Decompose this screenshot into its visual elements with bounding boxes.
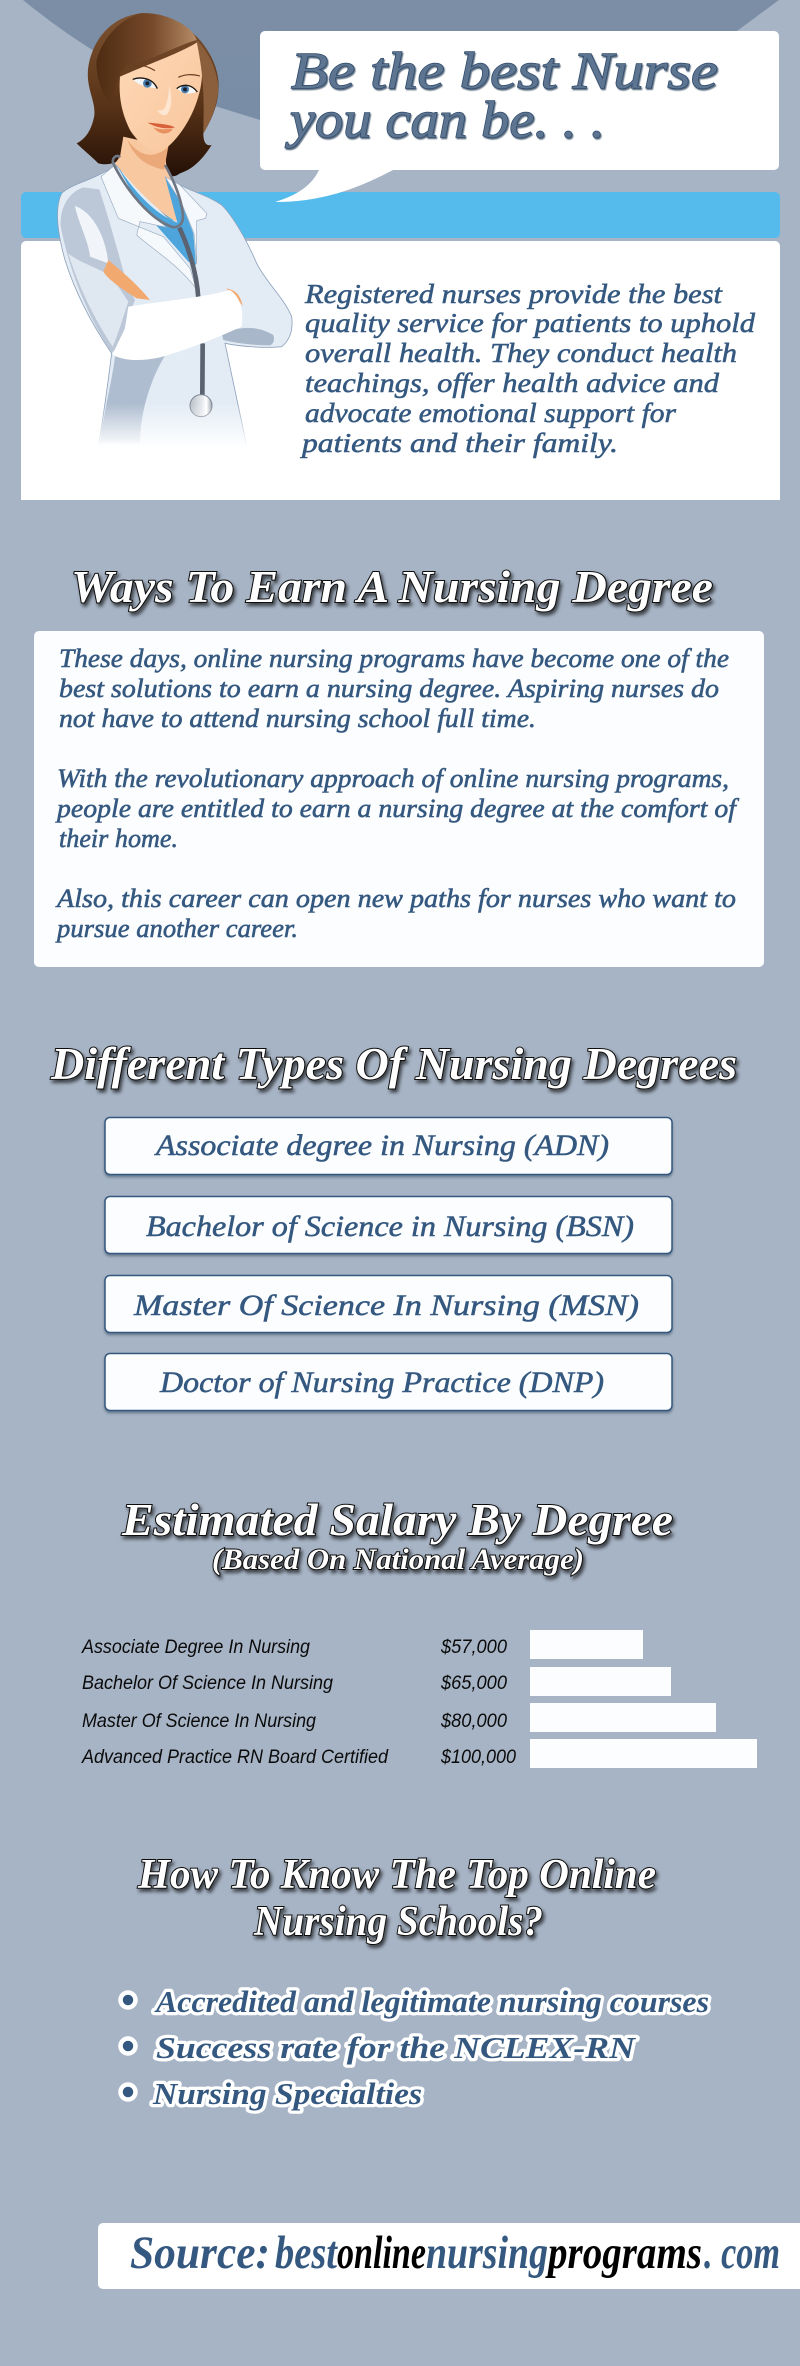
face: [120, 42, 202, 152]
left sleeve highlight: [75, 206, 108, 263]
row: bachelor: [82, 1667, 671, 1696]
right hair strand: [197, 40, 218, 133]
source box: [98, 2223, 800, 2289]
speech bubble: [260, 31, 779, 202]
heading: top online schools: How To Know The Top Online: [137, 1852, 656, 1898]
intro text: advocate emotional support for: [305, 398, 677, 428]
list: school criteria: [120, 1984, 709, 2111]
right forearm shadow: [222, 328, 274, 345]
intro text: patients and their family.: [300, 428, 618, 458]
panel: ways to earn: [34, 631, 764, 967]
row: master: $80,000: [440, 1710, 507, 1732]
heading: degree types: Different Types Of Nursing Degrees: [50, 1038, 737, 1089]
heading: top online schools: Nursing Schools?: [253, 1899, 543, 1945]
white intro panel: [21, 241, 780, 500]
intro text: quality service for patients to uphold: [305, 308, 756, 338]
title: [285, 43, 718, 149]
row: associate: Associate Degree In Nursing: [81, 1636, 310, 1658]
front hair: [96, 13, 197, 108]
ways to earn text: people are entitled to earn a nursing degree at the comfort of: [55, 794, 740, 823]
heading: salary: Estimated Salary By Degree: [121, 1494, 673, 1545]
title: Be the best Nurse: [291, 43, 718, 100]
degree box: MSN: [105, 1276, 672, 1332]
bullet item 3: Nursing Specialties: [152, 2076, 422, 2111]
left sleeve lower light: [68, 253, 128, 347]
degree box: BSN: Bachelor of Science in Nursing (BSN): [146, 1210, 634, 1243]
left sleeve shadow: [61, 187, 135, 353]
title: you can be. . .: [285, 92, 605, 149]
ways to earn text: Also, this career can open new paths for nurses who want to: [55, 884, 736, 913]
dark header shape: [23, 0, 779, 120]
row: bachelor: Bachelor Of Science In Nursing: [82, 1672, 333, 1694]
neck shadow: [127, 140, 168, 170]
subheading: national average: (Based On National Average): [212, 1543, 584, 1576]
nose: [157, 85, 171, 115]
intro text: Registered nurses provide the best: [304, 279, 724, 309]
row: advanced: Advanced Practice RN Board Certified: [81, 1746, 389, 1768]
ways to earn text: their home.: [59, 824, 178, 853]
heading: ways to earn: Ways To Earn A Nursing Degree: [71, 561, 713, 612]
bullet item 2: Success rate for the NCLEX-RN: [156, 2030, 637, 2065]
chest skin: [115, 137, 177, 222]
source text: nursing: [426, 2227, 548, 2279]
source text: Source:: [130, 2227, 270, 2279]
intro text: [300, 279, 756, 458]
coat body: [58, 166, 292, 453]
source text: online: [337, 2227, 426, 2279]
stethoscope tubes: [113, 156, 203, 395]
hair back: [77, 13, 219, 176]
degree box: BSN: [105, 1196, 672, 1254]
row: advanced: [81, 1739, 757, 1768]
intro text: teachings, offer health advice and: [305, 368, 720, 398]
lips: [148, 123, 175, 133]
illustration: nurse: [58, 13, 292, 468]
source text: best: [275, 2227, 339, 2279]
right eye: [177, 85, 197, 94]
degree box: DNP: [105, 1354, 672, 1410]
row: advanced: $100,000: [440, 1746, 516, 1768]
degree box: DNP: Doctor of Nursing Practice (DNP): [159, 1366, 604, 1399]
left eye: [133, 78, 157, 89]
intro text: overall health. They conduct health: [305, 338, 737, 368]
row: associate: $57,000: [440, 1636, 507, 1658]
ways to earn text: With the revolutionary approach of online nursing programs,: [57, 764, 729, 793]
left collar: [101, 165, 196, 288]
eyebrows: [134, 66, 200, 77]
coat lower shadow: [100, 347, 171, 443]
row: master: [82, 1703, 716, 1732]
ways to earn text: not have to attend nursing school full time.: [59, 704, 536, 733]
right hand: [226, 289, 243, 306]
ways to earn text: best solutions to earn a nursing degree. Aspiring nurses do: [59, 674, 719, 703]
blue band: [21, 192, 780, 238]
degree box: ADN: [105, 1118, 672, 1174]
source text: programs: [545, 2227, 702, 2279]
right collar: [165, 177, 207, 264]
chest piece: [190, 395, 212, 417]
ways to earn text: These days, online nursing programs have become one of the: [59, 644, 729, 673]
bar chart: salary by degree: [81, 1630, 757, 1768]
row: master: Master Of Science In Nursing: [82, 1710, 316, 1732]
row: associate: [81, 1630, 643, 1659]
source text: [130, 2227, 780, 2279]
degree box: ADN: Associate degree in Nursing (ADN): [154, 1129, 609, 1162]
heading: top online schools: [137, 1852, 656, 1945]
bullet item 1: Accredited and legitimate nursing courses: [154, 1984, 709, 2019]
row: bachelor: $65,000: [440, 1672, 507, 1694]
ways to earn text: [55, 644, 740, 943]
scrub top: [117, 165, 196, 265]
degree box: MSN: Master Of Science In Nursing (MSN): [133, 1289, 639, 1322]
coat hem fade: [87, 403, 257, 468]
left hand: [103, 260, 150, 300]
white sleeve: [113, 290, 242, 360]
ways to earn text: pursue another career.: [55, 914, 298, 943]
